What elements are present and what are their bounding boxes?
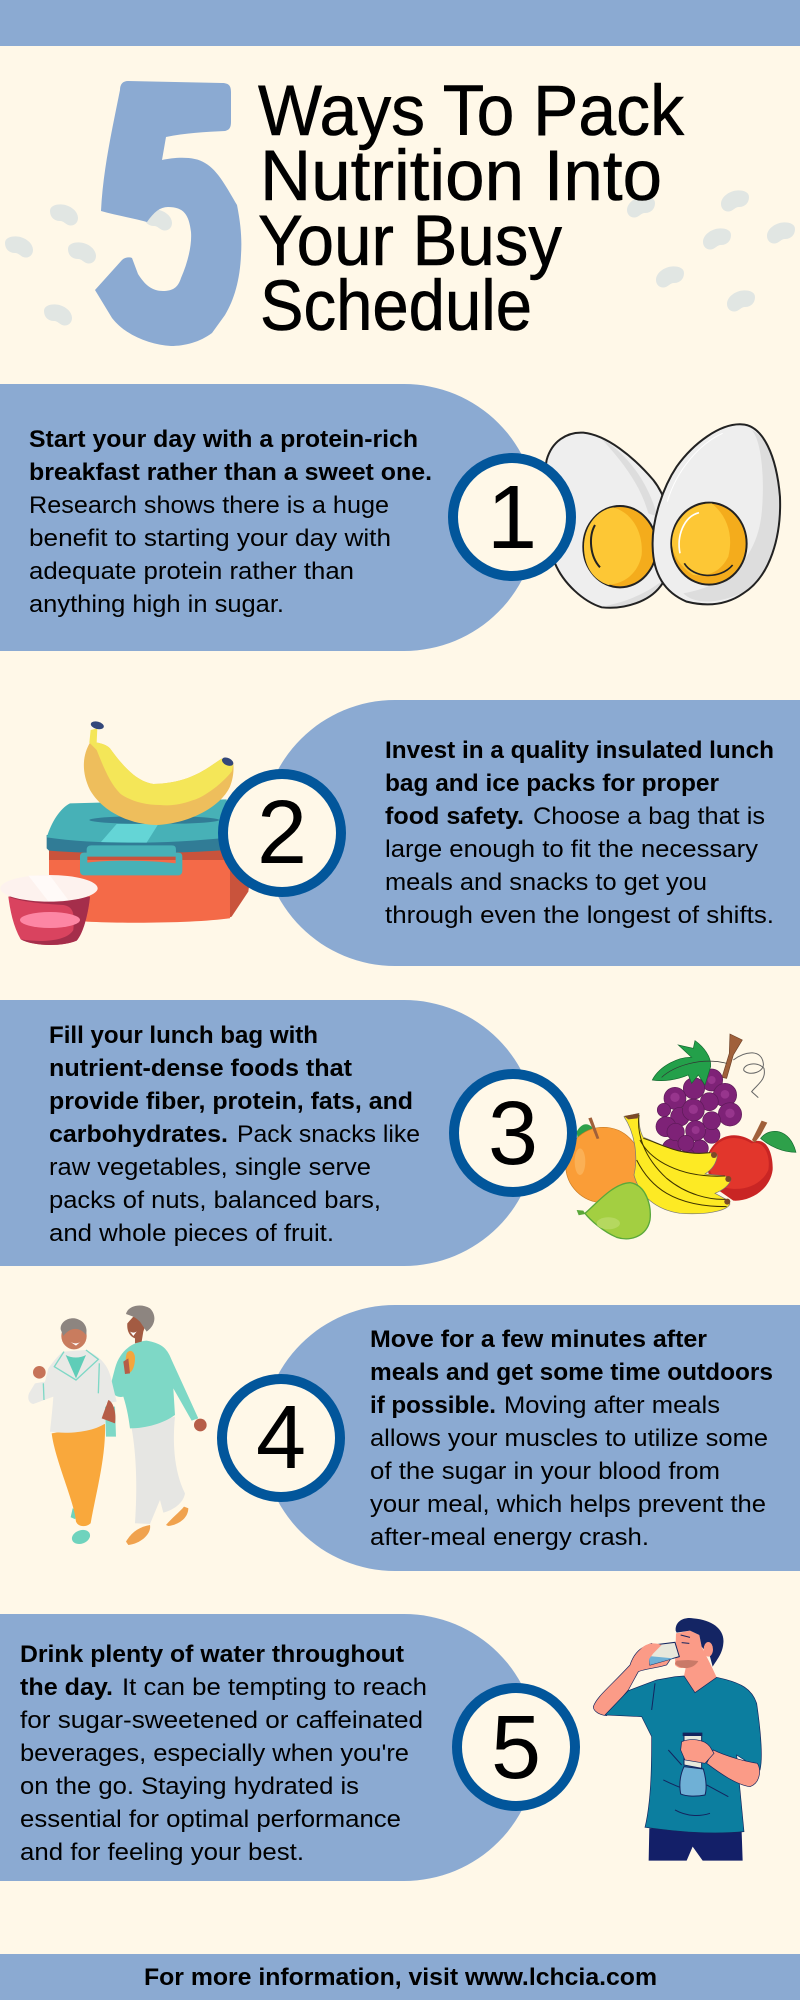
- panel 1 text: breakfast rather than a sweet one.: [29, 459, 432, 486]
- panel 1 text: anything high in sugar.: [29, 591, 284, 618]
- panel 4 text: of the sugar in your blood from: [370, 1458, 720, 1485]
- panel 4 text: after-meal energy crash.: [370, 1524, 649, 1551]
- panel 3 text: nutrient-dense foods that: [49, 1055, 352, 1082]
- footer bar: [0, 1954, 800, 2000]
- panel 4 background: [262, 1305, 800, 1571]
- panel 1 text: benefit to starting your day with: [29, 525, 391, 552]
- panel 4 text: allows your muscles to utilize some: [370, 1425, 768, 1452]
- panel 1 background: [0, 384, 538, 651]
- panel 2 text: Choose a bag that is: [533, 803, 765, 830]
- number badge 4: [222, 1379, 340, 1497]
- icon: man drinking water: [593, 1618, 761, 1861]
- panel 4: move after meals: [28, 1305, 800, 1571]
- panel 2 text: meals and snacks to get you: [385, 869, 707, 896]
- panel 2: lunch bag: [0, 700, 800, 966]
- panel 4 text: meals and get some time outdoors: [370, 1359, 773, 1386]
- number badge 3: [454, 1074, 572, 1192]
- decorative beans left: [5, 204, 172, 326]
- panel 1 text: Research shows there is a huge: [29, 492, 389, 519]
- panel 2 text: bag and ice packs for proper: [385, 770, 719, 797]
- panel 5 text: and for feeling your best.: [20, 1839, 304, 1866]
- panel 5 text: essential for optimal performance: [20, 1806, 401, 1833]
- big decorative numeral 5: [95, 81, 241, 346]
- panel 4 text: your meal, which helps prevent the: [370, 1491, 766, 1518]
- panel 5 text: [20, 1641, 427, 1866]
- panel 3 text: and whole pieces of fruit.: [49, 1220, 334, 1247]
- panel 3 text: carbohydrates.: [49, 1121, 228, 1148]
- panel 2 text: through even the longest of shifts.: [385, 902, 774, 929]
- number badge 1: [453, 458, 571, 576]
- panel 3 text: packs of nuts, balanced bars,: [49, 1187, 381, 1214]
- panel 3: nutrient-dense foods: [0, 1000, 796, 1266]
- panel 1 text: adequate protein rather than: [29, 558, 354, 585]
- top banner: [0, 0, 800, 46]
- panel 4 text: if possible.: [370, 1392, 496, 1419]
- panel 4 text: Moving after meals: [504, 1392, 720, 1419]
- title: Your Busy: [258, 202, 562, 281]
- panel 5 text: Drink plenty of water throughout: [20, 1641, 404, 1668]
- number badge 3: 3: [488, 1084, 538, 1184]
- panel 3 background: [0, 1000, 537, 1266]
- panel 4 text: Move for a few minutes after: [370, 1326, 707, 1353]
- number badge 5: [457, 1688, 575, 1806]
- panel 3 text: [49, 1022, 420, 1247]
- icon: lunch bag, banana and yogurt: [0, 720, 253, 945]
- panel 5 text: for sugar-sweetened or caffeinated: [20, 1707, 423, 1734]
- title: Ways To Pack: [258, 72, 684, 151]
- icon: boiled eggs: [545, 424, 780, 608]
- panel 1 text: [29, 426, 432, 618]
- panel 5 text: It can be tempting to reach: [122, 1674, 427, 1701]
- panel 5 text: on the go. Staying hydrated is: [20, 1773, 359, 1800]
- panel 5: drink water: [0, 1614, 761, 1881]
- number badge 2: 2: [257, 783, 307, 883]
- panel 3 text: Pack snacks like: [237, 1121, 420, 1148]
- icon: fruit pile: [566, 1034, 796, 1239]
- number badge 5: 5: [491, 1698, 541, 1798]
- panel 2 text: food safety.: [385, 803, 524, 830]
- footer text: For more information, visit www.lchcia.com: [144, 1964, 657, 1991]
- panel 1: protein breakfast: [0, 384, 780, 651]
- title: [258, 72, 684, 346]
- decorative beans right: [627, 190, 795, 312]
- panel 2 background: [262, 700, 800, 966]
- panel 2 text: [385, 737, 774, 929]
- panel 5 text: the day.: [20, 1674, 113, 1701]
- title: Schedule: [260, 267, 532, 346]
- icon: two people walking: [28, 1306, 207, 1546]
- panel 3 text: Fill your lunch bag with: [49, 1022, 318, 1049]
- panel 3 text: provide fiber, protein, fats, and: [49, 1088, 413, 1115]
- panel 3 text: raw vegetables, single serve: [49, 1154, 371, 1181]
- panel 1 text: Start your day with a protein-rich: [29, 426, 418, 453]
- number badge 1: 1: [487, 468, 537, 568]
- panel 5 background: [0, 1614, 538, 1881]
- panel 5 text: beverages, especially when you're: [20, 1740, 409, 1767]
- panel 4 text: [370, 1326, 773, 1551]
- number badge 2: [223, 774, 341, 892]
- title: Nutrition Into: [260, 137, 662, 216]
- panel 2 text: Invest in a quality insulated lunch: [385, 737, 774, 764]
- panel 2 text: large enough to fit the necessary: [385, 836, 758, 863]
- number badge 4: 4: [256, 1388, 306, 1488]
